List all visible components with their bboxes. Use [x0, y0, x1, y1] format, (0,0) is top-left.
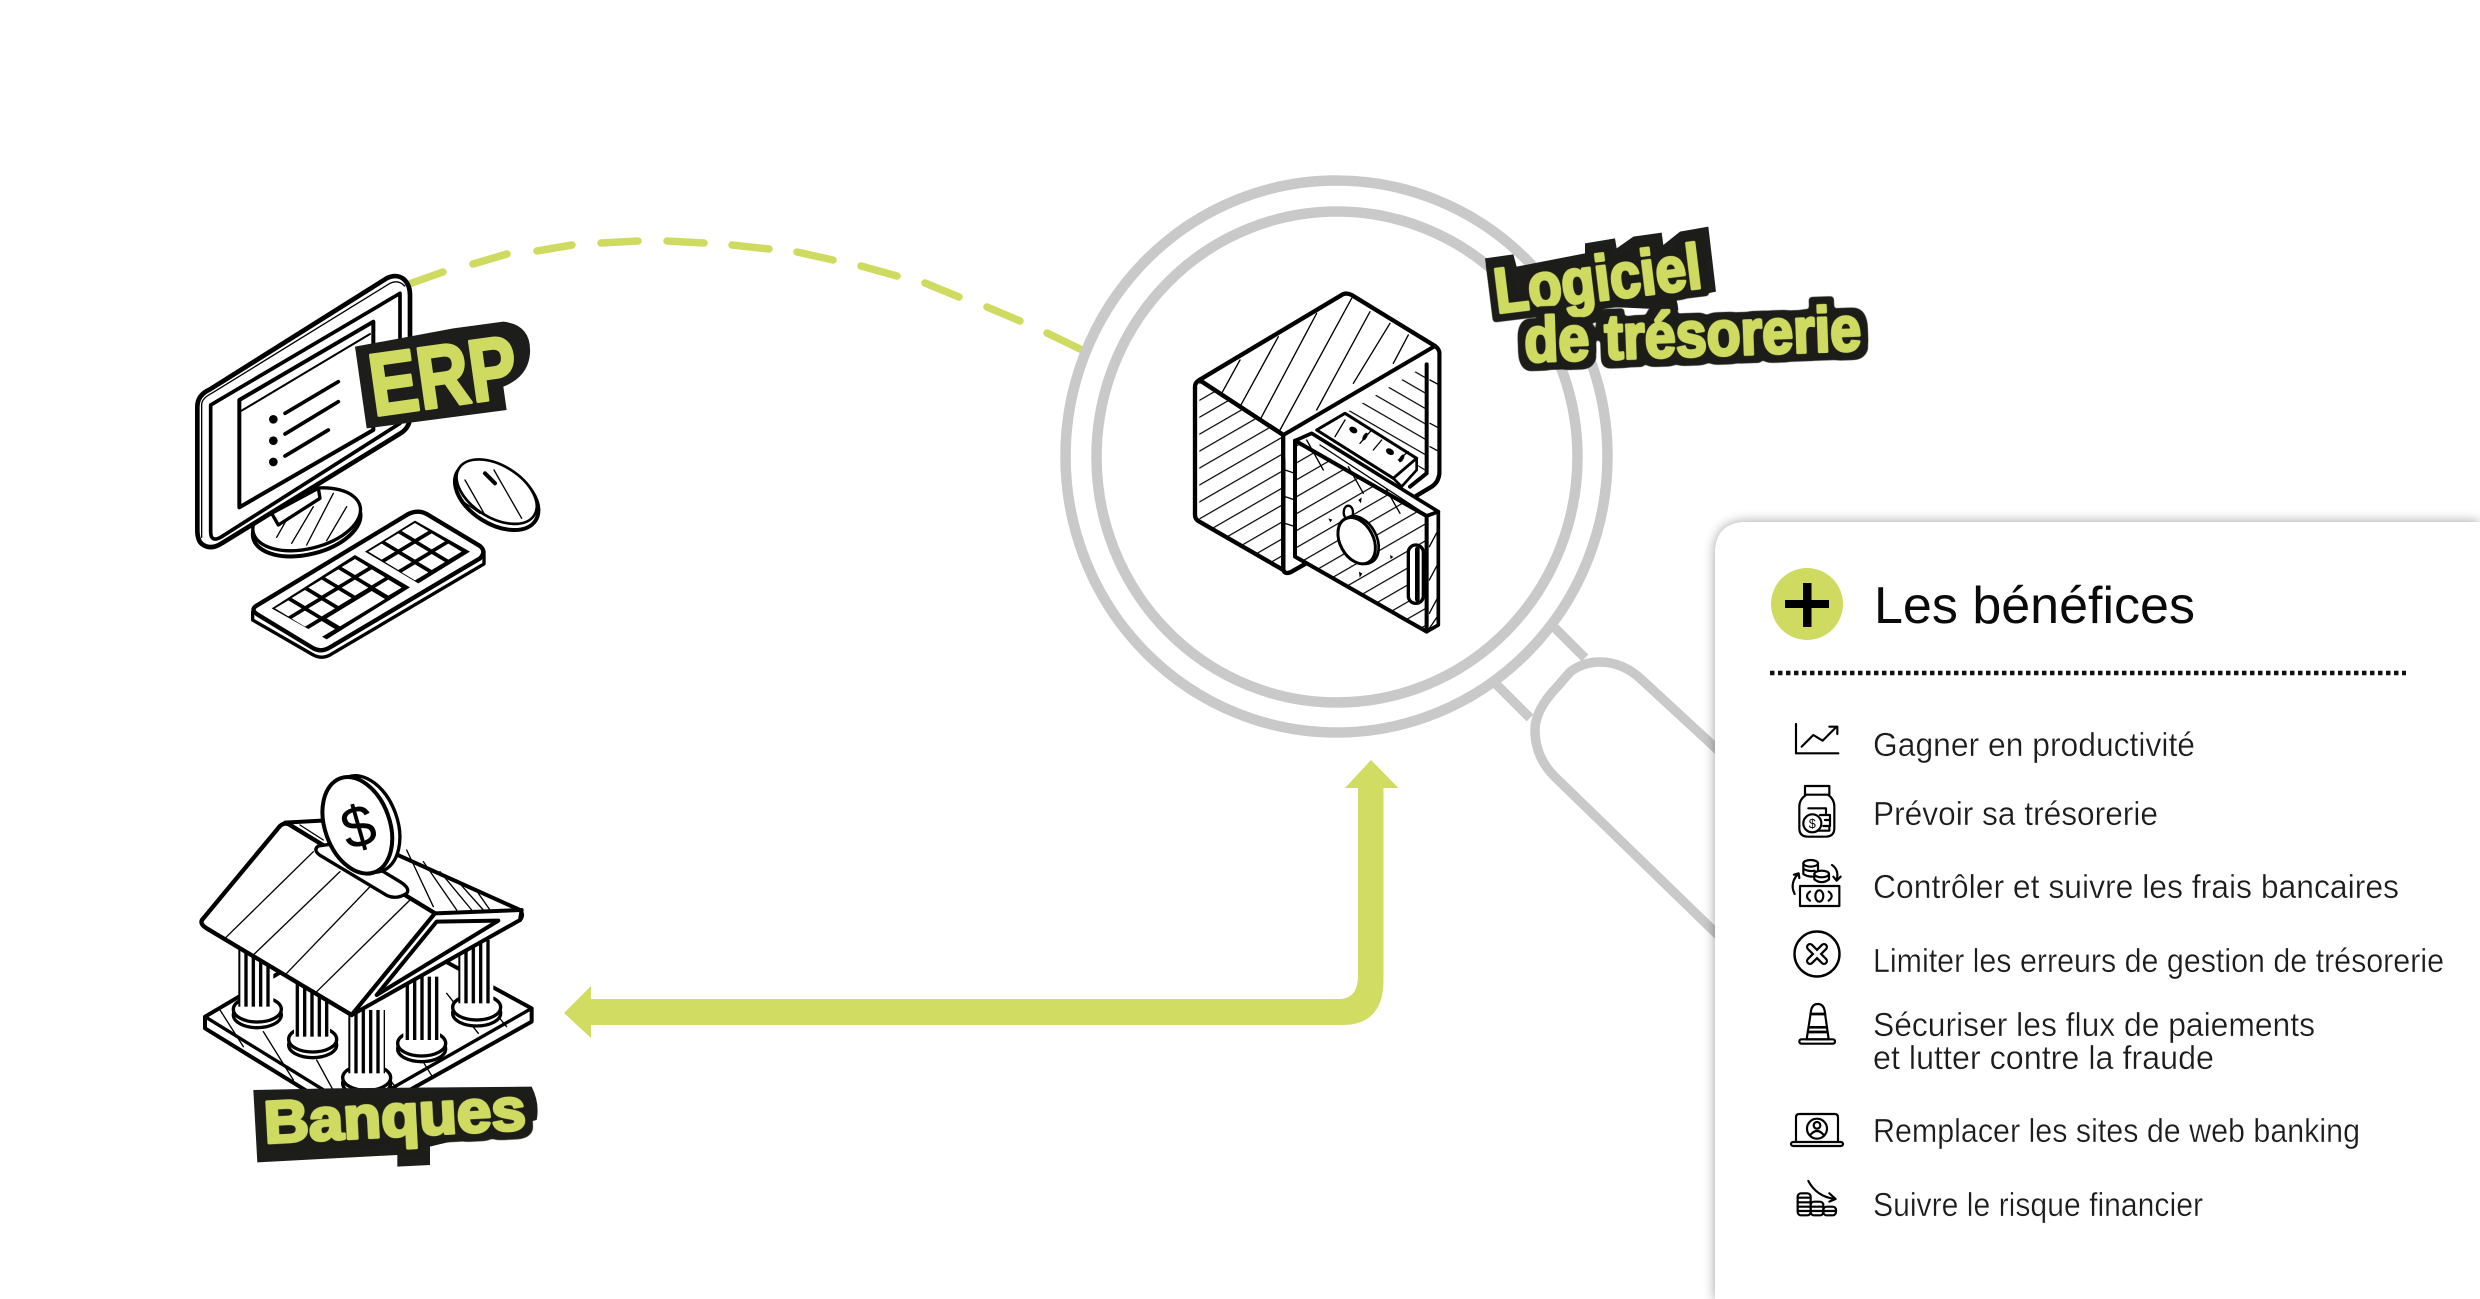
roof	[201, 821, 522, 1015]
text line 1: Logiciel	[1490, 232, 1705, 327]
magnifying glass	[1066, 180, 1720, 937]
icon: laptop user	[1791, 1114, 1843, 1146]
label backing	[1485, 227, 1716, 320]
icon: computer	[197, 276, 551, 657]
monitor	[197, 276, 410, 547]
icon: traffic cone	[1799, 1004, 1835, 1044]
label: Logiciel de trésorerie	[1485, 227, 1862, 376]
icon: error cross	[1794, 932, 1840, 976]
coin	[310, 766, 412, 883]
label backing	[253, 1087, 538, 1167]
bank floor	[205, 920, 532, 1121]
item: secure payments: et lutter contre la fraude	[1873, 1039, 2214, 1076]
item: web banking: Remplacer les sites de web banking	[1873, 1112, 2360, 1149]
item: forecast: Prévoir sa trésorerie	[1873, 795, 2158, 832]
arrow: banks to software	[564, 760, 1398, 1038]
text line 2: de trésorerie	[1523, 294, 1862, 376]
item: financial risk: Suivre le risque financier	[1873, 1186, 2203, 1223]
icon: coins and banknote	[1793, 860, 1841, 906]
icon: growth chart	[1796, 724, 1838, 753]
dashed connector: ERP to software	[409, 241, 1080, 349]
panel card	[1715, 522, 2480, 1299]
icon: bank	[201, 766, 532, 1121]
keyboard	[253, 512, 484, 657]
safe door	[1295, 413, 1438, 632]
panel heading: Les bénéfices	[1874, 577, 2195, 635]
item: secure payments: Sécuriser les flux de paiements	[1873, 1006, 2315, 1043]
mouse	[443, 446, 551, 544]
icon: falling coins	[1798, 1181, 1836, 1215]
item: errors: Limiter les erreurs de gestion de trésorerie	[1873, 942, 2444, 979]
panel: benefits	[1715, 522, 2480, 1299]
columns	[233, 940, 501, 1096]
label: Banques	[253, 1076, 538, 1167]
ERP text: ERP	[363, 316, 523, 435]
icon: savings jar	[1799, 786, 1834, 837]
Banques text: Banques	[262, 1076, 527, 1156]
safe body	[1195, 294, 1439, 573]
plus badge	[1771, 568, 1843, 640]
label: ERP	[355, 316, 530, 435]
icon: safe	[1195, 294, 1439, 632]
item: productivity: Gagner en productivité	[1873, 726, 2195, 763]
item: secure payments	[1873, 1006, 2315, 1076]
icon: savings jar: $	[1809, 817, 1816, 831]
label backing	[355, 322, 530, 428]
stand and base	[246, 478, 367, 567]
dollar sign: $	[334, 791, 383, 863]
item: fees: Contrôler et suivre les frais bancaires	[1873, 868, 2399, 905]
